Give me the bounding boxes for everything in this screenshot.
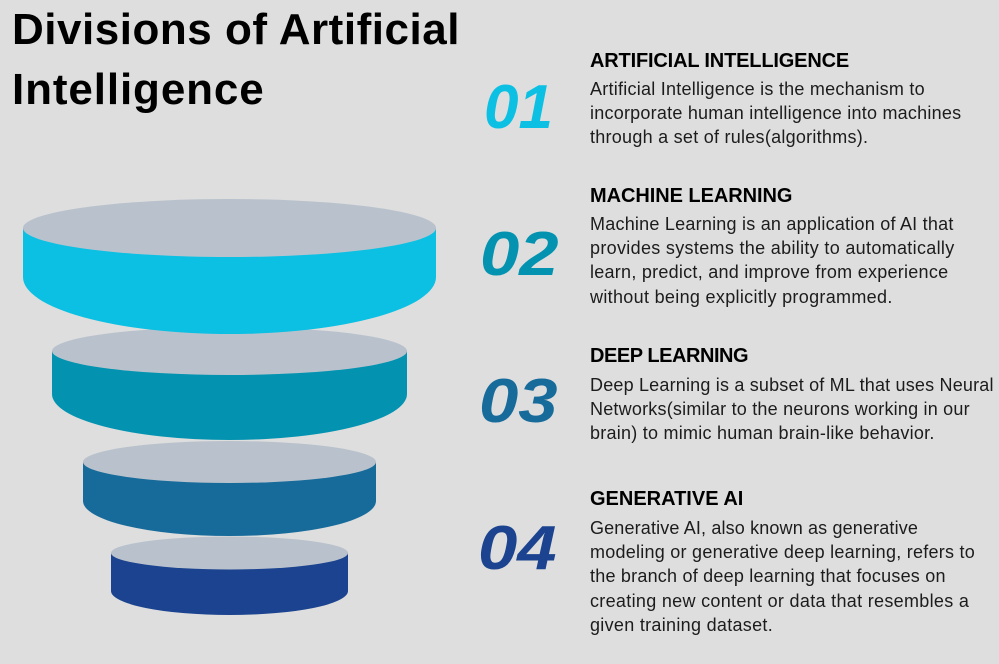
text: generative ai [590, 518, 975, 635]
heading: artificial intelligence: ARTIFICIAL INTELLIGENCE [590, 50, 849, 72]
number 04: 04 [478, 514, 557, 583]
heading: machine learning: MACHINE LEARNING [590, 185, 792, 207]
text: deep learning: brain) to mimic human brain-like behavior. [590, 423, 935, 443]
title [12, 5, 460, 114]
text: artificial intelligence [590, 79, 961, 147]
text: machine learning [590, 214, 955, 307]
number 02: 02 [480, 220, 559, 289]
text: machine learning: without being explicitly programmed. [590, 287, 893, 307]
text: artificial intelligence: incorporate human intelligence into machines [590, 103, 961, 123]
number 03: 03 [479, 367, 558, 436]
heading: generative ai: GENERATIVE AI [590, 488, 743, 510]
funnel tier 2 [52, 327, 407, 440]
text: generative ai: creating new content or data that resembles a [590, 591, 969, 611]
text: machine learning: learn, predict, and improve from experience [590, 262, 948, 282]
title: Divisions of Artificial [12, 5, 460, 54]
heading: deep learning: DEEP LEARNING [590, 345, 748, 367]
text: artificial intelligence: Artificial Intelligence is the mechanism to [590, 79, 925, 99]
text: artificial intelligence: through a set of rules(algorithms). [590, 127, 868, 147]
text: generative ai: modeling or generative deep learning, refers to [590, 542, 975, 562]
text: machine learning: provides systems the ability to automatically [590, 238, 955, 258]
number 01: 01 [484, 73, 553, 142]
text: deep learning [590, 375, 994, 443]
funnel chart [23, 199, 436, 615]
text: generative ai: given training dataset. [590, 615, 773, 635]
funnel tier 3 [83, 441, 376, 536]
text: generative ai: Generative AI, also known as generative [590, 518, 918, 538]
text: deep learning: Networks(similar to the neurons working in our [590, 399, 970, 419]
title: Intelligence [12, 65, 265, 114]
funnel tier 1 [23, 199, 436, 334]
text: deep learning: Deep Learning is a subset of ML that uses Neural [590, 375, 994, 395]
text: generative ai: the branch of deep learning that focuses on [590, 566, 946, 586]
funnel tier 4 [111, 536, 348, 615]
text: machine learning: Machine Learning is an application of AI that [590, 214, 954, 234]
